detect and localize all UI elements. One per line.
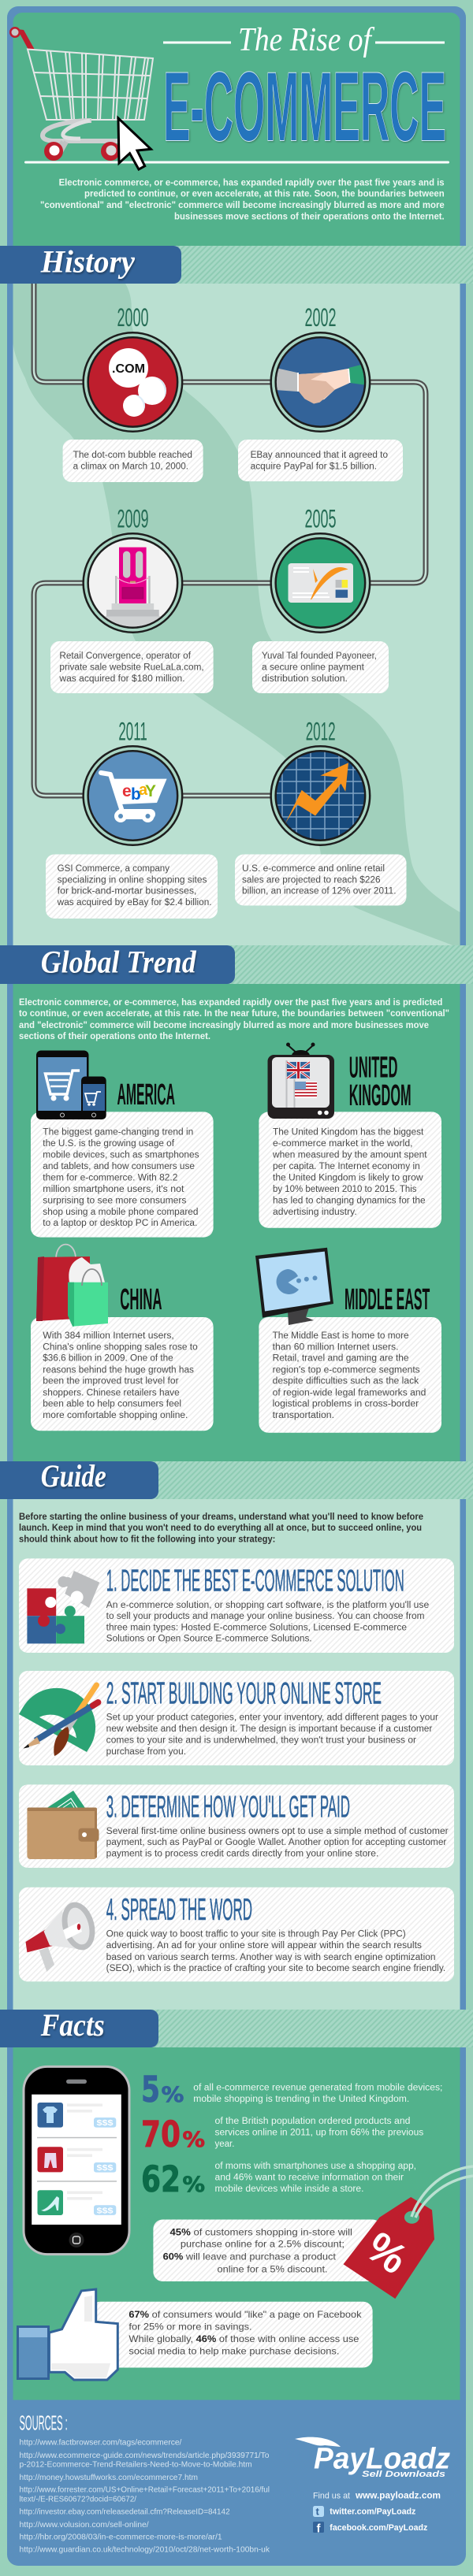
callout: 2012: sales are projected to reach $226 [242, 875, 381, 885]
stat: 70% [141, 2114, 424, 2155]
icon: growth chart [270, 745, 371, 846]
card: middle east: region's top e-commerce segments [273, 1365, 420, 1375]
step 4 [19, 1887, 454, 1981]
icon: shopping bags [36, 1245, 108, 1327]
icon: design tools [19, 1685, 98, 1756]
stat: 70%: services online in 2011, up from 66% the previous [214, 2129, 424, 2138]
card: america: and tablets, and how consumers use [43, 1162, 195, 1171]
logo: payloadz: Sell Downloads [362, 2470, 445, 2479]
year 2005: 2005 [304, 504, 336, 533]
stat: 5%: mobile shopping is trending in the United Kingdom. [193, 2095, 409, 2104]
stat: 5%: 5 [141, 2069, 160, 2110]
intro text: should think about how to fit the following into your strategy: [19, 1535, 275, 1544]
stat: 5%: of all e-commerce revenue generated from mobile devices; [193, 2083, 442, 2092]
timeline connector [34, 284, 426, 796]
callout: facebook likes [91, 2302, 373, 2368]
card: america: to a laptop or desktop PC in America. [43, 1219, 197, 1228]
card: america: The biggest game-changing trend in [43, 1128, 193, 1138]
callout: 2012 [235, 854, 407, 906]
sources list: http://www.forrester.com/US+Online+Retail+Forecast+2011+To+2016/ful [19, 2486, 270, 2494]
heading band: guide: Guide [41, 1458, 106, 1494]
icon: ebay cart: b [131, 785, 141, 804]
card: china: been able to help consumers feel [43, 1400, 181, 1409]
icon: price tag [344, 2166, 473, 2299]
icon: ebay cart: e [122, 782, 132, 800]
stat: 70%: of the British population ordered products and [214, 2117, 410, 2126]
step 2: Set up your product categories, enter your inventory, add different pages to your [106, 1713, 438, 1723]
step 1 [19, 1558, 454, 1653]
wave background [13, 284, 460, 945]
intro text [19, 1513, 423, 1544]
callout: 2002: EBay announced that it agreed to [251, 451, 388, 460]
callout: 2009: Retail Convergence, operator of [59, 651, 192, 661]
step 1: An e-commerce solution, or shopping cart software, is the platform you'll use [106, 1601, 429, 1610]
callout: 2005 [252, 641, 389, 693]
callout: facebook likes: social media to help make purchase decisions. [128, 2346, 339, 2357]
sources list: http://www.factbrowser.com/tags/ecommerce/ [19, 2439, 182, 2447]
callout: facebook likes: While globally, 46% of those with online access use [128, 2333, 359, 2344]
sources list: http://www.ecommerce-guide.com/news/trends/article.php/3939771/To [19, 2452, 270, 2460]
icon: smartphone: $$$ [96, 2207, 114, 2215]
card: united kingdom: per capita. The Internet economy in [273, 1162, 420, 1171]
step 2: comes to your site and is underwhelmed, they won't trust your business or [106, 1735, 416, 1745]
card: america: shop using a mobile phone compared [43, 1208, 198, 1217]
callout: 2011 [46, 854, 218, 919]
step 4: based on various search terms. Another way is with search engine optimization [106, 1953, 436, 1962]
callout: 2012: U.S. e-commerce and online retail [242, 864, 385, 874]
step 2: new website and then design it. The design is important because if a customer [106, 1724, 433, 1734]
year 2011: 2011 [118, 718, 147, 746]
contact links [313, 2492, 441, 2535]
step 3: payment is to process credit cards directly from your online store. [106, 1850, 378, 1859]
heading band: global trend [0, 945, 473, 984]
sources list: ltext/-/E-RES60672?docid=60672/ [19, 2496, 136, 2504]
sources list: http://money.howstuffworks.com/ecommerce7.htm [19, 2474, 198, 2482]
callout: 2011: GSI Commerce, a company [58, 864, 169, 874]
icon: dot-com bubble [82, 332, 183, 432]
icon: shopping cart [9, 27, 153, 161]
step 2: purchase from you. [106, 1747, 186, 1757]
card: middle east: of region-wide legal frameworks and [273, 1388, 426, 1397]
icon: smartphone [24, 2066, 129, 2255]
heading band: global trend: Global Trend [41, 945, 197, 980]
callout: 2009 [50, 641, 214, 693]
icon: handshake [270, 332, 371, 432]
card: china: more comfortable shopping online. [43, 1411, 188, 1420]
card: united kingdom: when measured by the amount spent [272, 1151, 427, 1160]
card: united kingdom: the United Kingdom is likely to grow [273, 1173, 423, 1182]
panel: global trend: AMERICA [117, 1078, 175, 1112]
stat: 70%: % [183, 2128, 205, 2152]
title: The Rise of [163, 22, 445, 58]
callout: facebook likes: 67% of consumers would "like" a page on Facebook [128, 2309, 363, 2320]
callout: 2005: distribution solution. [262, 674, 348, 684]
card: china: reasons behind the huge growth has [43, 1365, 194, 1375]
logo: payloadz [295, 2437, 450, 2479]
contact links: Find us at [313, 2492, 350, 2501]
intro text: Electronic commerce, or e-commerce, has expanded rapidly over the past five years and is predicted [19, 998, 442, 1008]
step 1: three main types: Hosted E-commerce Solutions, Licensed E-commerce [106, 1623, 407, 1632]
label: united kingdom [349, 1051, 412, 1112]
card: middle east: despite difficulties such as the lack [273, 1377, 419, 1386]
icon: dot-com bubble: .COM [112, 362, 145, 376]
card: china: shoppers. Chinese retailers have [43, 1388, 180, 1397]
callout: 2009: private sale website RueLaLa.com, [59, 663, 204, 673]
icon: wallet [27, 1791, 99, 1859]
step 3: payment, such as PayPal or Google Wallet. Another option for accepting customer [106, 1838, 447, 1847]
stat: 62%: % [183, 2173, 205, 2197]
label: united kingdom: UNITED [349, 1051, 397, 1084]
panel: facts [13, 2047, 473, 2400]
callout: 2009: was acquired for $180 million. [58, 674, 185, 684]
heading band: guide [0, 1458, 473, 1499]
icon: door [82, 533, 183, 633]
year 2002: 2002 [304, 303, 336, 332]
icon: monitor [255, 1248, 333, 1325]
panel: global trend [13, 984, 460, 1461]
callout: 2000: a climax on March 10, 2000. [73, 462, 188, 471]
panel: header [9, 13, 460, 246]
card: america: the U.S. is the growing usage of [43, 1139, 175, 1149]
callout: 2011: for brick-and-mortar businesses, [58, 887, 197, 896]
callout: 2002: acquire PayPal for $1.5 billion. [251, 462, 377, 471]
card: united kingdom: has led to changing dynamics for the [273, 1196, 426, 1205]
icon: mouse pointer [118, 118, 151, 169]
card: middle east: Retail, travel and gaming are the [273, 1354, 409, 1364]
icon: smartphone: $$$ [96, 2164, 114, 2173]
card: china: been the improved trust level for [43, 1377, 179, 1386]
stat: 5%: % [162, 2083, 184, 2107]
intro text [40, 178, 445, 222]
callout: facebook likes: for 25% or more in savings. [128, 2321, 252, 2332]
callout: 2000 [63, 440, 203, 482]
callout: 2000: The dot-com bubble reached [73, 451, 192, 460]
callout: 2011: was acquired by eBay for $2.4 billion. [57, 898, 212, 908]
card: middle east: The Middle East is home to more [273, 1331, 409, 1341]
card: america: mobile devices, such as smartphones [43, 1151, 199, 1160]
panel: history [13, 284, 460, 945]
intro text: "conventional" and "electronic" commerce will become increasingly blurred as more and more [40, 201, 445, 210]
card: china: China's online shopping sales rose to [43, 1342, 198, 1352]
intro text: and "electronic" commerce will become increasingly blurred as more and more businesses move [19, 1021, 429, 1030]
icon: twitter: t [315, 2505, 320, 2518]
sources list [19, 2411, 270, 2554]
sources list: http://www.guardian.co.uk/technology/2010/oct/28/net-worth-100bn-uk [19, 2546, 270, 2554]
step 2 [19, 1671, 454, 1765]
callout: 2005: Yuval Tal founded Payoneer, [262, 651, 377, 661]
year 2000: 2000 [117, 303, 148, 332]
icon: ebay cart: a [139, 781, 148, 799]
stat: 70%: year. [214, 2140, 234, 2149]
sources list: http://investor.ebay.com/releasedetail.cfm?ReleaseID=84142 [19, 2508, 230, 2516]
intro text: sections of their operations onto the Internet. [19, 1032, 210, 1041]
heading band: history: History [40, 244, 135, 280]
card: middle east: transportation. [273, 1411, 334, 1420]
card: china [31, 1317, 214, 1431]
intro text: predicted to continue, or even accelerate, at this rate. Soon, the boundaries between [84, 190, 445, 199]
callout: 2005: a secure online payment [262, 663, 365, 673]
sources list: p-2012-Ecommerce-Trend-Retailers-Need-to-Move-to-Mobile.htm [19, 2461, 252, 2469]
step 4: (SEO), which is the practice of crafting your site to become search engine friendly. [106, 1964, 445, 1973]
intro text: businesses move sections of their operations onto the Internet. [174, 213, 445, 222]
card: america [31, 1112, 214, 1238]
callout: discount: 60% will leave and purchase a product [163, 2251, 337, 2262]
stat: 62%: of moms with smartphones use a shopping app, [214, 2162, 416, 2171]
callout: discount: online for a 5% discount. [218, 2263, 328, 2274]
card: america: them for e-commerce. With 82.2 [43, 1173, 177, 1182]
callout: 2011: specializing in online shopping sites [58, 875, 207, 885]
contact links: www.payloadz.com [355, 2492, 441, 2501]
callout: discount: 45% of customers shopping in-store will [170, 2226, 352, 2237]
stat: 62%: and 46% want to receive information on their [214, 2173, 404, 2182]
icon: price tag: % [358, 2223, 415, 2284]
icon: facebook [313, 2522, 324, 2535]
year 2012: 2012 [306, 718, 336, 746]
sources list: SOURCES : [19, 2411, 68, 2435]
step 1: to sell your products and manage your online business. You can choose from [106, 1612, 424, 1621]
heading band: history [0, 244, 473, 284]
icon: ebay cart: Y [145, 782, 156, 800]
panel: guide [13, 1499, 460, 2010]
card: america: million smartphone users, it's not [43, 1185, 184, 1194]
card: middle east [259, 1317, 441, 1433]
sources list: http://www.volusion.com/sell-online/ [19, 2521, 149, 2530]
stat: 70%: 70 [141, 2114, 181, 2155]
icon: thumbs up [17, 2289, 117, 2380]
contact links: twitter.com/PayLoadz [330, 2507, 416, 2517]
icon: twitter [313, 2505, 324, 2518]
stat: 62%: 62 [141, 2158, 181, 2200]
icon: tablet and phone [36, 1051, 106, 1119]
step 4: 4. SPREAD THE WORD [106, 1893, 252, 1927]
card: america: surprising to see more consumers [43, 1196, 187, 1205]
intro text: Electronic commerce, or e-commerce, has expanded rapidly over the past five years and is [59, 178, 445, 187]
year 2009: 2009 [117, 504, 148, 533]
intro text [19, 998, 449, 1041]
intro text: Before starting the online business of your dreams, understand what you'll need to know before [19, 1513, 423, 1522]
callout: discount [153, 2220, 382, 2281]
card: china: $36.6 billion in 2009. One of the [43, 1354, 173, 1364]
icon: facebook: f [317, 2522, 322, 2535]
card: middle east: than 60 million Internet users. [273, 1342, 399, 1352]
card: united kingdom [259, 1112, 441, 1228]
icon: television with flags [268, 1043, 334, 1119]
step 4: One quick way to boost traffic to your site is through Pay Per Click (PPC) [106, 1930, 406, 1939]
heading band: facts: Facts [40, 2007, 105, 2043]
callout: discount: purchase online for a 2.5% discount; [181, 2239, 345, 2250]
icon: puzzle [27, 1571, 99, 1643]
panel: global trend: CHINA [120, 1283, 162, 1316]
step 1: Solutions or Open Source E-commerce Solutions. [106, 1635, 312, 1644]
step 3: Several first-time online business owners opt to use a simple method of customer [106, 1827, 449, 1836]
card: middle east: logistical problems in cross-border [273, 1400, 419, 1409]
callout: 2012: billion, an increase of 12% over 2011. [242, 887, 396, 896]
sources list: http://hbr.org/2008/03/in-e-commerce-more-is-more/ar/1 [19, 2533, 222, 2541]
intro text: to continue, or even accelerate, at this rate. In the near future, the boundaries between "conventional" [19, 1009, 449, 1019]
stat: 62%: mobile devices while inside a store. [214, 2184, 364, 2194]
card: china: With 384 million Internet users, [43, 1331, 174, 1341]
intro text: launch. Keep in mind that you won't need to do everything all at once, but to succeed online, you [19, 1524, 422, 1533]
icon: smartphone: $$$ [96, 2119, 114, 2128]
heading band: facts [0, 2007, 473, 2047]
stat: 5% [141, 2069, 442, 2110]
ground line [24, 161, 449, 164]
contact links: facebook.com/PayLoadz [330, 2523, 428, 2533]
card: united kingdom: The United Kingdom has the biggest [273, 1128, 424, 1138]
icon: payment card [270, 533, 371, 633]
callout: 2002 [238, 440, 403, 481]
step 4: advertising. An ad for your online store will appear within the search results [106, 1941, 422, 1951]
step 3 [19, 1784, 454, 1868]
card: united kingdom: advertising industry. [273, 1208, 357, 1217]
stat: 62% [141, 2158, 416, 2200]
icon: megaphone [25, 1899, 100, 1972]
card: united kingdom: e-commerce market in the world, [273, 1139, 413, 1149]
card: united kingdom: by 10% between 2010 to 2015. This [273, 1185, 417, 1194]
title: The Rise of: The Rise of [238, 22, 375, 58]
icon: ebay cart [82, 745, 183, 846]
logo: payloadz: PayLoadz [314, 2443, 450, 2476]
